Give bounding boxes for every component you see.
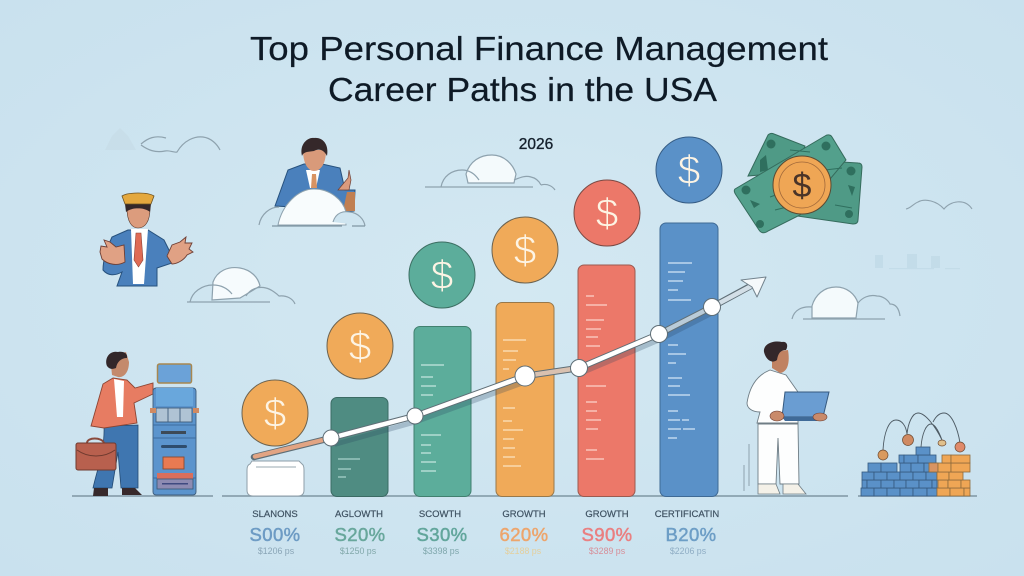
coral jacket bbox=[91, 378, 153, 428]
coin 2 bbox=[327, 313, 393, 379]
left hand bbox=[100, 240, 125, 264]
ground line bbox=[72, 495, 977, 497]
gold coin: $ bbox=[793, 167, 812, 205]
raised hand bbox=[338, 170, 351, 190]
bar: aglowth bbox=[331, 398, 388, 496]
ATM machine bbox=[150, 364, 199, 495]
column: certification: $2206 ps bbox=[670, 546, 707, 556]
cloud: center left bbox=[187, 268, 295, 304]
arcs bbox=[883, 413, 960, 450]
column: growth orange: 620% bbox=[500, 524, 548, 545]
column: scowth: $3398 ps bbox=[423, 546, 460, 556]
bar chart bbox=[247, 223, 718, 496]
column: certification bbox=[655, 509, 719, 556]
head and hair bbox=[772, 350, 789, 373]
column: growth orange: GROWTH bbox=[502, 509, 546, 520]
column: growth orange bbox=[500, 509, 548, 556]
column: certification: CERTIFICATIN bbox=[655, 509, 719, 520]
column: aglowth bbox=[335, 509, 385, 556]
bar: growth red bbox=[578, 265, 635, 496]
money stack with coin bbox=[734, 133, 862, 233]
person: woman with briefcase beside ATM bbox=[76, 352, 199, 496]
person: advisor behind cloud bbox=[259, 138, 365, 226]
column: scowth: SCOWTH bbox=[419, 509, 461, 520]
bar: slanons bbox=[247, 461, 304, 496]
bar: certification bbox=[660, 223, 718, 496]
column: growth red: GROWTH bbox=[585, 509, 629, 520]
data columns bbox=[250, 509, 719, 556]
brick wall with arcs bbox=[861, 413, 970, 496]
coin 6: $ bbox=[678, 147, 701, 193]
briefcase bbox=[87, 438, 104, 443]
growth trend line with arrow bbox=[254, 277, 766, 457]
white trousers bbox=[758, 424, 799, 484]
column: aglowth: AGLOWTH bbox=[335, 509, 383, 520]
column: growth orange: $2188 ps bbox=[505, 546, 542, 556]
column: scowth bbox=[417, 509, 467, 556]
trousers bbox=[93, 425, 138, 488]
coin 6 bbox=[656, 137, 722, 203]
motion lines bbox=[744, 444, 749, 491]
hands bbox=[770, 411, 784, 421]
shoes bbox=[758, 484, 806, 494]
bar: growth orange bbox=[496, 302, 554, 496]
head bbox=[127, 208, 150, 228]
column: slanons: $1206 ps bbox=[258, 546, 295, 556]
title: Career Paths in the USA bbox=[328, 71, 717, 108]
hair and head bbox=[110, 352, 129, 377]
column: slanons: S00% bbox=[250, 524, 300, 545]
column: slanons: SLANONS bbox=[252, 509, 298, 520]
column: growth red: S90% bbox=[582, 524, 632, 545]
coin 1 bbox=[242, 380, 308, 446]
right bill bbox=[790, 160, 862, 224]
small coins bbox=[878, 434, 965, 460]
cloud: right bbox=[792, 287, 900, 319]
bar: scowth bbox=[414, 326, 471, 496]
suit bbox=[103, 230, 175, 286]
column: growth red bbox=[582, 509, 632, 556]
laptop bbox=[782, 392, 829, 417]
coin 3 bbox=[409, 242, 475, 308]
cloud in front bbox=[278, 189, 346, 225]
person: analyst with laptop bbox=[744, 341, 829, 494]
cloud: top center bbox=[425, 155, 555, 190]
coin 5: $ bbox=[596, 190, 619, 236]
column: aglowth: S20% bbox=[335, 524, 385, 545]
white shirt bbox=[747, 370, 798, 423]
column: growth red: $3289 ps bbox=[589, 546, 626, 556]
title: Top Personal Finance Management bbox=[250, 30, 828, 67]
coin 2: $ bbox=[349, 323, 372, 369]
year label: 2026 bbox=[519, 136, 553, 153]
back bill bbox=[748, 133, 805, 176]
column: slanons bbox=[250, 509, 300, 556]
blue bricks bbox=[861, 447, 937, 496]
head bbox=[303, 150, 326, 171]
title bbox=[250, 30, 828, 108]
column: aglowth: $1250 ps bbox=[340, 546, 377, 556]
left bill bbox=[734, 135, 846, 233]
arrow head bbox=[741, 277, 766, 297]
coin 5 bbox=[574, 180, 640, 246]
faint skyline bbox=[875, 254, 960, 269]
right hand bbox=[167, 237, 193, 264]
column: scowth: S30% bbox=[417, 524, 467, 545]
cloud: far right bbox=[906, 200, 972, 209]
bill ornaments bbox=[742, 140, 856, 228]
orange bricks bbox=[929, 455, 970, 496]
person: presenter with yellow hat bbox=[100, 193, 193, 286]
coin 4: $ bbox=[514, 227, 537, 273]
coin 4 bbox=[492, 217, 558, 283]
column: certification: B20% bbox=[666, 524, 716, 545]
data points bbox=[323, 298, 720, 446]
shoes bbox=[93, 488, 142, 496]
shirt bbox=[114, 379, 124, 417]
yellow hat bbox=[122, 193, 154, 204]
coins bbox=[242, 137, 722, 446]
coin 3: $ bbox=[431, 252, 454, 298]
coin 1: $ bbox=[264, 390, 287, 436]
suit bbox=[275, 164, 355, 212]
cloud: top left bbox=[105, 128, 220, 152]
shirt and tie bbox=[131, 229, 148, 284]
